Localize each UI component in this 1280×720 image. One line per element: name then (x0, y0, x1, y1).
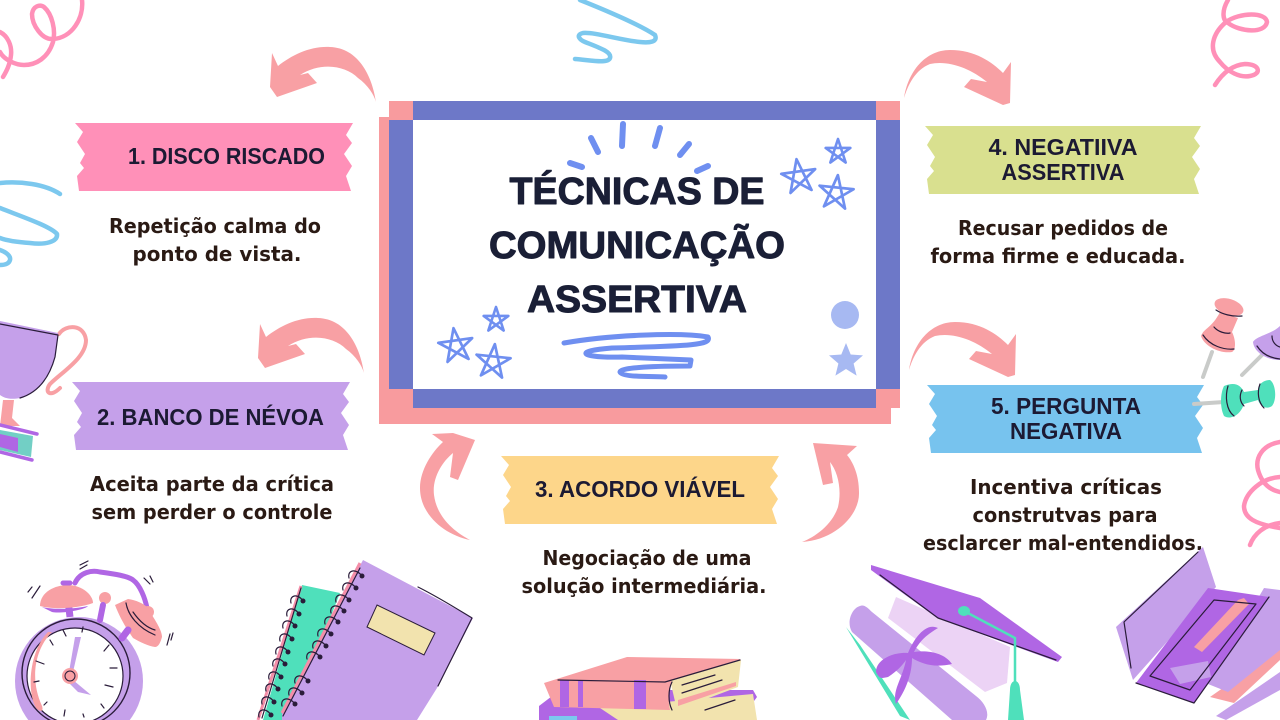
squiggle: pink top left (0, 0, 82, 77)
title (489, 169, 785, 321)
text: technique 3 description (522, 546, 766, 598)
text: technique 1 description: ponto de vista. (132, 242, 302, 266)
ribbon 1: Disco riscado (75, 123, 353, 191)
ribbon 3: Acordo viável: 3. ACORDO VIÁVEL (535, 475, 745, 502)
title: ASSERTIVA (527, 279, 747, 321)
decoration: stars bottom left (437, 307, 512, 378)
squiggle: blue top center (575, 0, 656, 61)
text: technique 3 description: solução intermediária. (522, 574, 766, 598)
pin: green (1194, 380, 1275, 418)
icon: push pins (1194, 295, 1280, 418)
text: technique 5 description (923, 475, 1203, 555)
ribbon 4: Negativa assertiva (925, 126, 1201, 194)
text: technique 2 description: Aceita parte da crítica (90, 472, 334, 496)
arrow: toward technique 4 (904, 50, 1011, 105)
pin: coral (1201, 295, 1246, 377)
text: technique 5 description: Incentiva críticas (970, 475, 1162, 499)
title: COMUNICAÇÃO (489, 223, 785, 267)
text: technique 4 description: forma firme e educada. (930, 244, 1186, 268)
ribbon 5: Pergunta negativa (927, 385, 1204, 453)
decoration: scribble underline (564, 335, 708, 377)
text: technique 5 description: esclarcer mal-entendidos. (923, 531, 1203, 555)
ribbon 2: Banco de névoa (72, 382, 350, 450)
ribbon 5: Pergunta negativa: NEGATIVA (1010, 418, 1122, 444)
squiggle: blue left (0, 182, 60, 265)
ribbon 1: Disco riscado: 1. DISCO RISCADO (128, 143, 325, 169)
squiggle: pink top right (1213, 0, 1267, 85)
ribbon 3: Acordo viável (501, 456, 779, 524)
icon: graduation cap and diploma (846, 565, 1062, 720)
arrow: toward technique 3 left (420, 433, 475, 540)
panel: central title frame (379, 101, 900, 424)
icon: alarm clock (15, 561, 173, 720)
ribbon 4: Negativa assertiva: ASSERTIVA (1002, 159, 1124, 185)
arrow: toward technique 2 (258, 318, 364, 373)
ribbon 2: Banco de névoa: 2. BANCO DE NÉVOA (97, 403, 324, 430)
text: technique 4 description: Recusar pedidos de (958, 216, 1168, 240)
icon: pencil case (1116, 547, 1280, 720)
text: technique 3 description: Negociação de uma (542, 546, 752, 570)
text: technique 2 description: sem perder o controle (92, 500, 332, 524)
ribbon 4: Negativa assertiva: 4. NEGATIIVA (988, 134, 1138, 160)
icon: spiral notebooks (258, 560, 473, 720)
text: technique 4 description (930, 216, 1186, 268)
arrow: toward technique 1 (270, 47, 376, 102)
ribbon 5: Pergunta negativa: 5. PERGUNTA (991, 393, 1141, 419)
icon: trophy (0, 321, 86, 460)
icon: stack of books (539, 657, 757, 720)
decoration: star (829, 343, 863, 376)
squiggle: pink lower right (1244, 442, 1280, 545)
arrow: toward technique 5 (909, 322, 1016, 377)
text: technique 1 description: Repetição calma do (109, 214, 321, 238)
decoration: rays (570, 124, 708, 171)
arrow: toward technique 3 right (802, 443, 859, 542)
text: technique 1 description (109, 214, 321, 266)
pin: purple (1242, 326, 1280, 375)
decoration: circle (831, 301, 859, 329)
decoration: stars top right (780, 139, 855, 209)
text: technique 5 description: construtvas para (972, 503, 1158, 527)
title: TÉCNICAS DE (510, 169, 764, 213)
text: technique 2 description (90, 472, 334, 524)
